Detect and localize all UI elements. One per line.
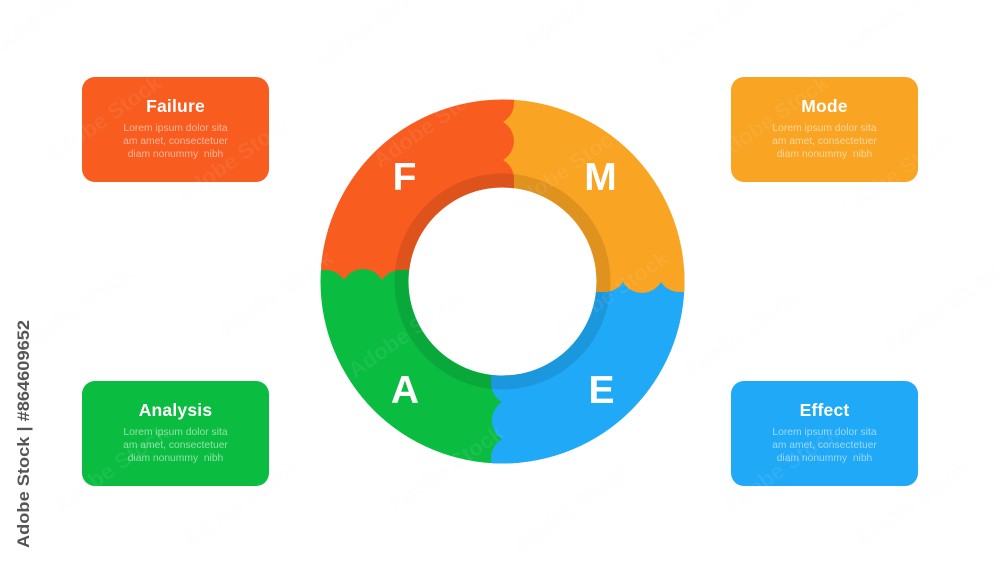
- watermark pattern: Adobe Stock: [548, 245, 674, 343]
- segment: E blue: [491, 270, 684, 464]
- watermark pattern: Adobe Stock: [213, 245, 339, 343]
- watermark pattern: Adobe Stock: [171, 110, 297, 208]
- heading: Effect: Effect: [800, 400, 849, 420]
- inner shadow ring: [402, 180, 604, 382]
- stock id caption: Adobe Stock | #864609652: [14, 320, 33, 548]
- watermark pattern: Adobe Stock: [48, 420, 174, 518]
- watermark pattern: Adobe Stock: [848, 455, 974, 553]
- segment: F red: [320, 100, 514, 280]
- card: Analysis: [82, 381, 269, 486]
- watermark pattern: Adobe Stock: [878, 260, 1000, 358]
- watermark pattern: Adobe Stock: [13, 260, 139, 358]
- text: Analysis description: Lorem ipsum dolor sita am amet, consectetuer diam nonummy nibh: [123, 426, 228, 464]
- letters: FMEA: A: [391, 369, 419, 412]
- watermark pattern: Adobe Stock: [368, 75, 494, 173]
- letters: FMEA: E: [588, 369, 615, 412]
- heading: Analysis: Analysis: [139, 400, 212, 420]
- watermark pattern: Adobe Stock: [718, 420, 844, 518]
- watermark pattern: Adobe Stock: [383, 420, 509, 518]
- segment: A green: [320, 260, 520, 464]
- watermark pattern: Adobe Stock: [343, 285, 469, 383]
- text: Effect description: Lorem ipsum dolor sita am amet, consectetuer diam nonummy nibh: [772, 426, 877, 464]
- watermark pattern: Adobe Stock: [508, 460, 634, 558]
- watermark pattern: Adobe Stock: [833, 125, 959, 223]
- card: Mode: [731, 77, 918, 182]
- letters: FMEA: [391, 156, 617, 412]
- watermark pattern: Adobe Stock: [708, 70, 834, 168]
- watermark pattern: Adobe Stock: [678, 285, 804, 383]
- card: Failure: [82, 77, 269, 182]
- text: Mode description: Lorem ipsum dolor sita am amet, consectetuer diam nonummy nibh: [772, 122, 877, 160]
- letters: FMEA: M: [584, 156, 617, 199]
- heading: Failure: Failure: [146, 96, 205, 116]
- card: Effect: [731, 381, 918, 486]
- text: Failure description: Lorem ipsum dolor sita am amet, consectetuer diam nonummy nibh: [123, 122, 228, 160]
- heading: Mode: Mode: [801, 96, 848, 116]
- watermark pattern: Adobe Stock: [178, 455, 304, 553]
- watermark pattern: Adobe Stock: [503, 120, 629, 218]
- donut chart: FMEA ring: [320, 100, 684, 464]
- watermark pattern: Adobe Stock: [41, 70, 167, 168]
- segment: M orange: [500, 100, 684, 293]
- letters: FMEA: F: [393, 156, 416, 199]
